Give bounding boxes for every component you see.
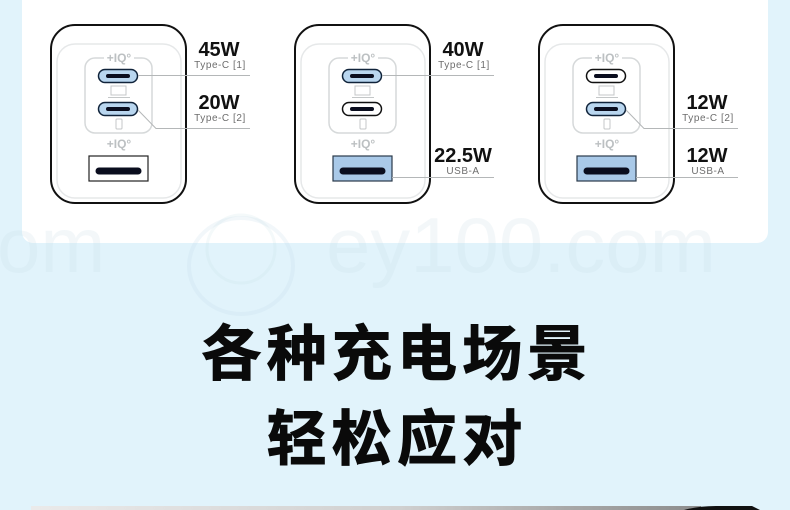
panel: white card xyxy=(22,0,768,243)
port: type-c 1 idle xyxy=(586,70,626,82)
label: 12W USB-A xyxy=(636,145,738,178)
label: 12W Type-C 2 xyxy=(626,92,738,128)
icon: phone xyxy=(116,119,122,129)
charger body xyxy=(539,25,674,203)
icon: laptop xyxy=(108,86,130,98)
label: 20W Type-C 2: 20W xyxy=(198,92,240,114)
charger body xyxy=(295,25,430,203)
inner outline xyxy=(301,44,425,198)
charger 3 xyxy=(539,25,674,203)
badge: IQ top: +IQ° xyxy=(595,51,619,65)
label: 22.5W USB-A xyxy=(392,145,494,178)
label: 12W Type-C 2: Type-C [2] xyxy=(682,113,734,124)
charger 2 xyxy=(295,25,430,203)
label: 40W Type-C 1 xyxy=(382,39,494,76)
bottom product edge xyxy=(31,506,760,510)
port: type-c 2 idle xyxy=(342,102,382,116)
port: usb-a active xyxy=(333,156,392,181)
label: 45W Type-C 1 xyxy=(138,39,250,76)
charger body xyxy=(51,25,186,203)
label: 22.5W USB-A: 22.5W xyxy=(434,145,492,167)
port group xyxy=(573,58,640,133)
charger 1 xyxy=(51,25,186,203)
badge: IQ lower: +IQ° xyxy=(351,137,375,151)
port group xyxy=(329,58,396,133)
label: 20W Type-C 2 xyxy=(138,92,250,128)
port group xyxy=(85,58,152,133)
badge: IQ lower: +IQ° xyxy=(595,137,619,151)
badge: IQ top: +IQ° xyxy=(107,51,131,65)
port: usb-a idle xyxy=(89,156,148,181)
label: 40W Type-C 1: Type-C [1] xyxy=(438,60,490,71)
label: 20W Type-C 2: Type-C [2] xyxy=(194,113,246,124)
port: type-c 2 active xyxy=(586,102,626,116)
icon: laptop xyxy=(596,86,618,98)
inner outline xyxy=(57,44,181,198)
watermark: om xyxy=(0,201,105,289)
label: 22.5W USB-A: USB-A xyxy=(446,166,480,177)
port: usb-a active xyxy=(577,156,636,181)
badge: IQ top: +IQ° xyxy=(351,51,375,65)
label: 45W Type-C 1: 45W xyxy=(198,39,240,61)
port: type-c 2 active xyxy=(98,102,138,116)
label: 12W Type-C 2: 12W xyxy=(686,92,728,114)
icon: laptop xyxy=(352,86,374,98)
label: 40W Type-C 1: 40W xyxy=(442,39,484,61)
title: 各种充电场景 xyxy=(201,321,593,388)
label: 12W USB-A: USB-A xyxy=(691,166,725,177)
port: type-c 1 active xyxy=(98,70,138,82)
icon: phone xyxy=(604,119,610,129)
icon: phone xyxy=(360,119,366,129)
label: 12W USB-A: 12W xyxy=(686,145,728,167)
title xyxy=(201,321,593,473)
label: 45W Type-C 1: Type-C [1] xyxy=(194,60,246,71)
title: 轻松应对 xyxy=(267,406,527,473)
watermark xyxy=(0,201,716,314)
badge: IQ lower: +IQ° xyxy=(107,137,131,151)
watermark: ey100.com xyxy=(326,201,716,289)
port: type-c 1 active xyxy=(342,70,382,82)
inner outline xyxy=(545,44,669,198)
